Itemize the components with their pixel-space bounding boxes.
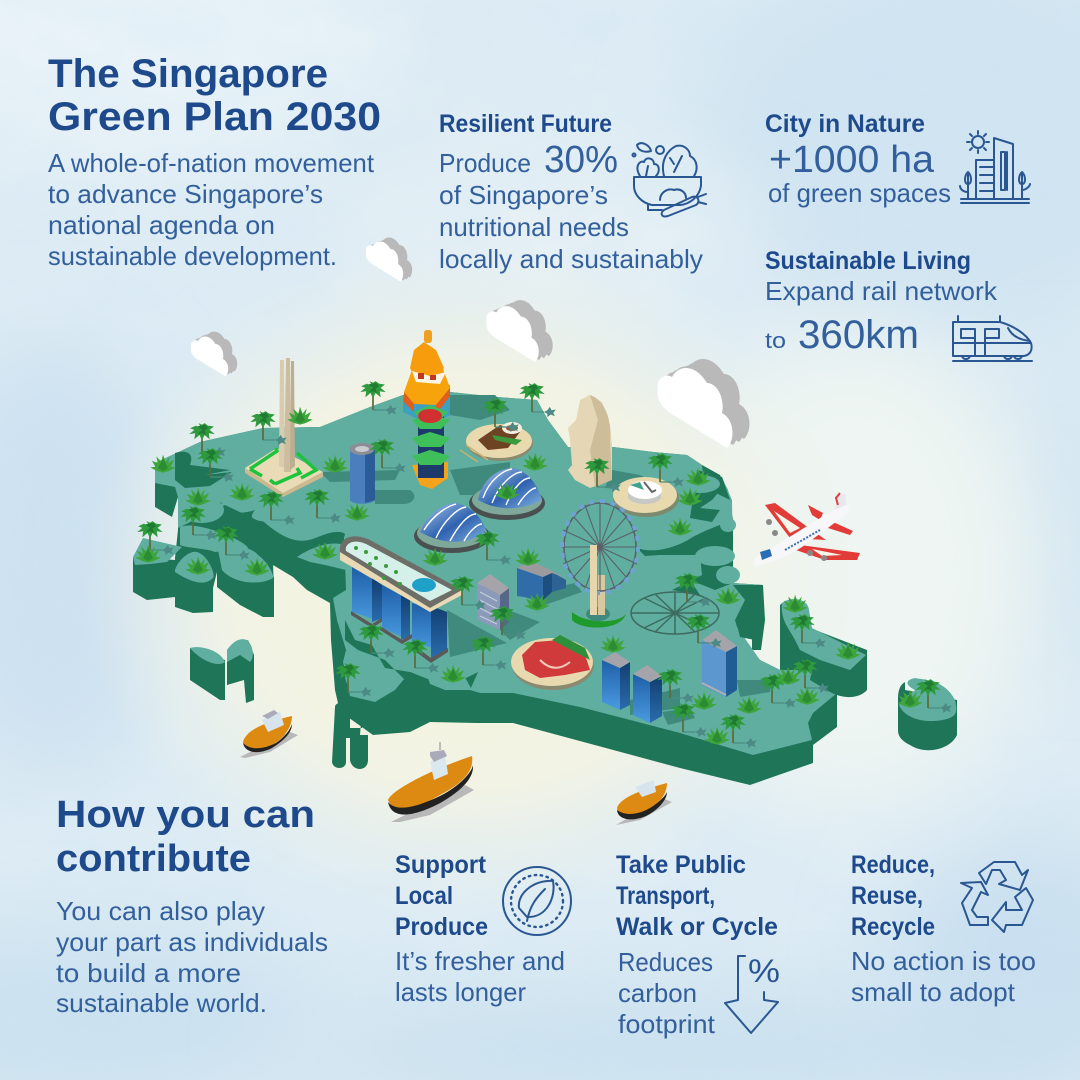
intro text: A whole-of-nation movement: [48, 148, 375, 178]
contribute text: [56, 896, 328, 1018]
intro text: sustainable development.: [48, 241, 337, 271]
block: reduce reuse recycle: No action is too: [851, 946, 1036, 976]
land sides: [155, 392, 837, 785]
title: Green Plan 2030: [48, 95, 381, 139]
clouds: [191, 237, 749, 448]
intro text: to advance Singapore’s: [48, 179, 323, 209]
block: city in nature: +1000 ha: [769, 139, 935, 181]
block: reduce reuse recycle: Reuse,: [851, 882, 923, 910]
block: sustainable living: to: [765, 328, 786, 353]
icon: city: [960, 131, 1030, 203]
block: support local produce: Produce: [395, 913, 488, 941]
creeks: [175, 452, 763, 690]
icon: train: [953, 316, 1032, 361]
block: take public transport: [616, 851, 778, 1039]
block: take public transport: footprint: [618, 1009, 716, 1039]
land lobes: [180, 475, 740, 695]
block: sustainable living: Expand rail network: [765, 276, 998, 306]
icon: percent down arrow: [725, 953, 780, 1033]
block: take public transport: Walk or Cycle: [616, 913, 778, 941]
contribute text: to build a more: [56, 958, 241, 988]
block: resilient future: Resilient Future: [439, 110, 612, 138]
food plate: satay: [460, 422, 533, 462]
block: sustainable living: Sustainable Living: [765, 247, 971, 275]
heading: how you can contribute: contribute: [56, 838, 251, 880]
block: support local produce: It’s fresher and: [395, 946, 565, 976]
intro text: national agenda on: [48, 210, 275, 240]
block: city in nature: [765, 110, 951, 208]
block: reduce reuse recycle: [851, 851, 1036, 1007]
block: resilient future: 30%: [544, 139, 618, 181]
block: support local produce: Local: [395, 882, 453, 910]
icon: percent down arrow: %: [748, 953, 780, 989]
landmark: blue L building: [517, 560, 582, 605]
block: reduce reuse recycle: Recycle: [851, 913, 935, 941]
map: Singapore island: [155, 392, 837, 785]
landmark: cylinder tower: [350, 443, 414, 504]
block: city in nature: City in Nature: [765, 110, 925, 138]
block: take public transport: Reduces: [618, 947, 713, 977]
block: take public transport: carbon: [618, 978, 697, 1008]
block: take public transport: Take Public: [616, 851, 746, 879]
block: resilient future: locally and sustainably: [439, 244, 703, 274]
landmark: memorial tower: [245, 358, 400, 497]
title: [48, 52, 381, 139]
block: sustainable living: [765, 247, 998, 357]
landmark: green pagoda: [412, 395, 510, 495]
contribute text: sustainable world.: [56, 988, 267, 1018]
block: resilient future: nutritional needs: [439, 212, 629, 242]
heading: how you can contribute: How you can: [56, 794, 315, 836]
block: reduce reuse recycle: Reduce,: [851, 851, 935, 879]
landmark: grey building: [477, 574, 540, 640]
block: reduce reuse recycle: small to adopt: [851, 977, 1016, 1007]
palm trees: [137, 381, 952, 748]
block: support local produce: lasts longer: [395, 977, 526, 1007]
plane: [753, 493, 860, 566]
block: support local produce: [395, 851, 565, 1007]
icon: leaf circle: [503, 867, 571, 935]
block: resilient future: [439, 110, 703, 274]
contribute text: your part as individuals: [56, 927, 328, 957]
ships: [240, 710, 672, 825]
block: sustainable living: 360km: [798, 313, 919, 357]
gardens domes: [414, 468, 545, 553]
title: The Singapore: [48, 52, 328, 96]
intro text: [48, 148, 375, 271]
landmark: merlion: [568, 395, 650, 490]
landmark: orange pagoda: [403, 330, 450, 425]
block: resilient future: of Singapore’s: [439, 180, 608, 210]
landmark: round plaza: [613, 477, 679, 517]
contribute text: You can also play: [56, 896, 265, 926]
bushes: [135, 407, 923, 745]
landmark: marina bay sands: [340, 536, 507, 663]
food plate: chilli crab: [511, 635, 594, 690]
block: city in nature: of green spaces: [768, 178, 951, 208]
landmark: singapore flyer: [562, 501, 719, 634]
land top: [155, 392, 837, 755]
icon: recycle: [961, 862, 1033, 932]
block: resilient future: Produce: [439, 148, 531, 178]
block: support local produce: Support: [395, 851, 487, 879]
buildings: blue towers: [602, 630, 772, 725]
islands: [133, 538, 957, 750]
heading: how you can contribute: [56, 794, 315, 880]
block: take public transport: Transport,: [616, 882, 715, 910]
icon: salad bowl: [632, 143, 706, 216]
